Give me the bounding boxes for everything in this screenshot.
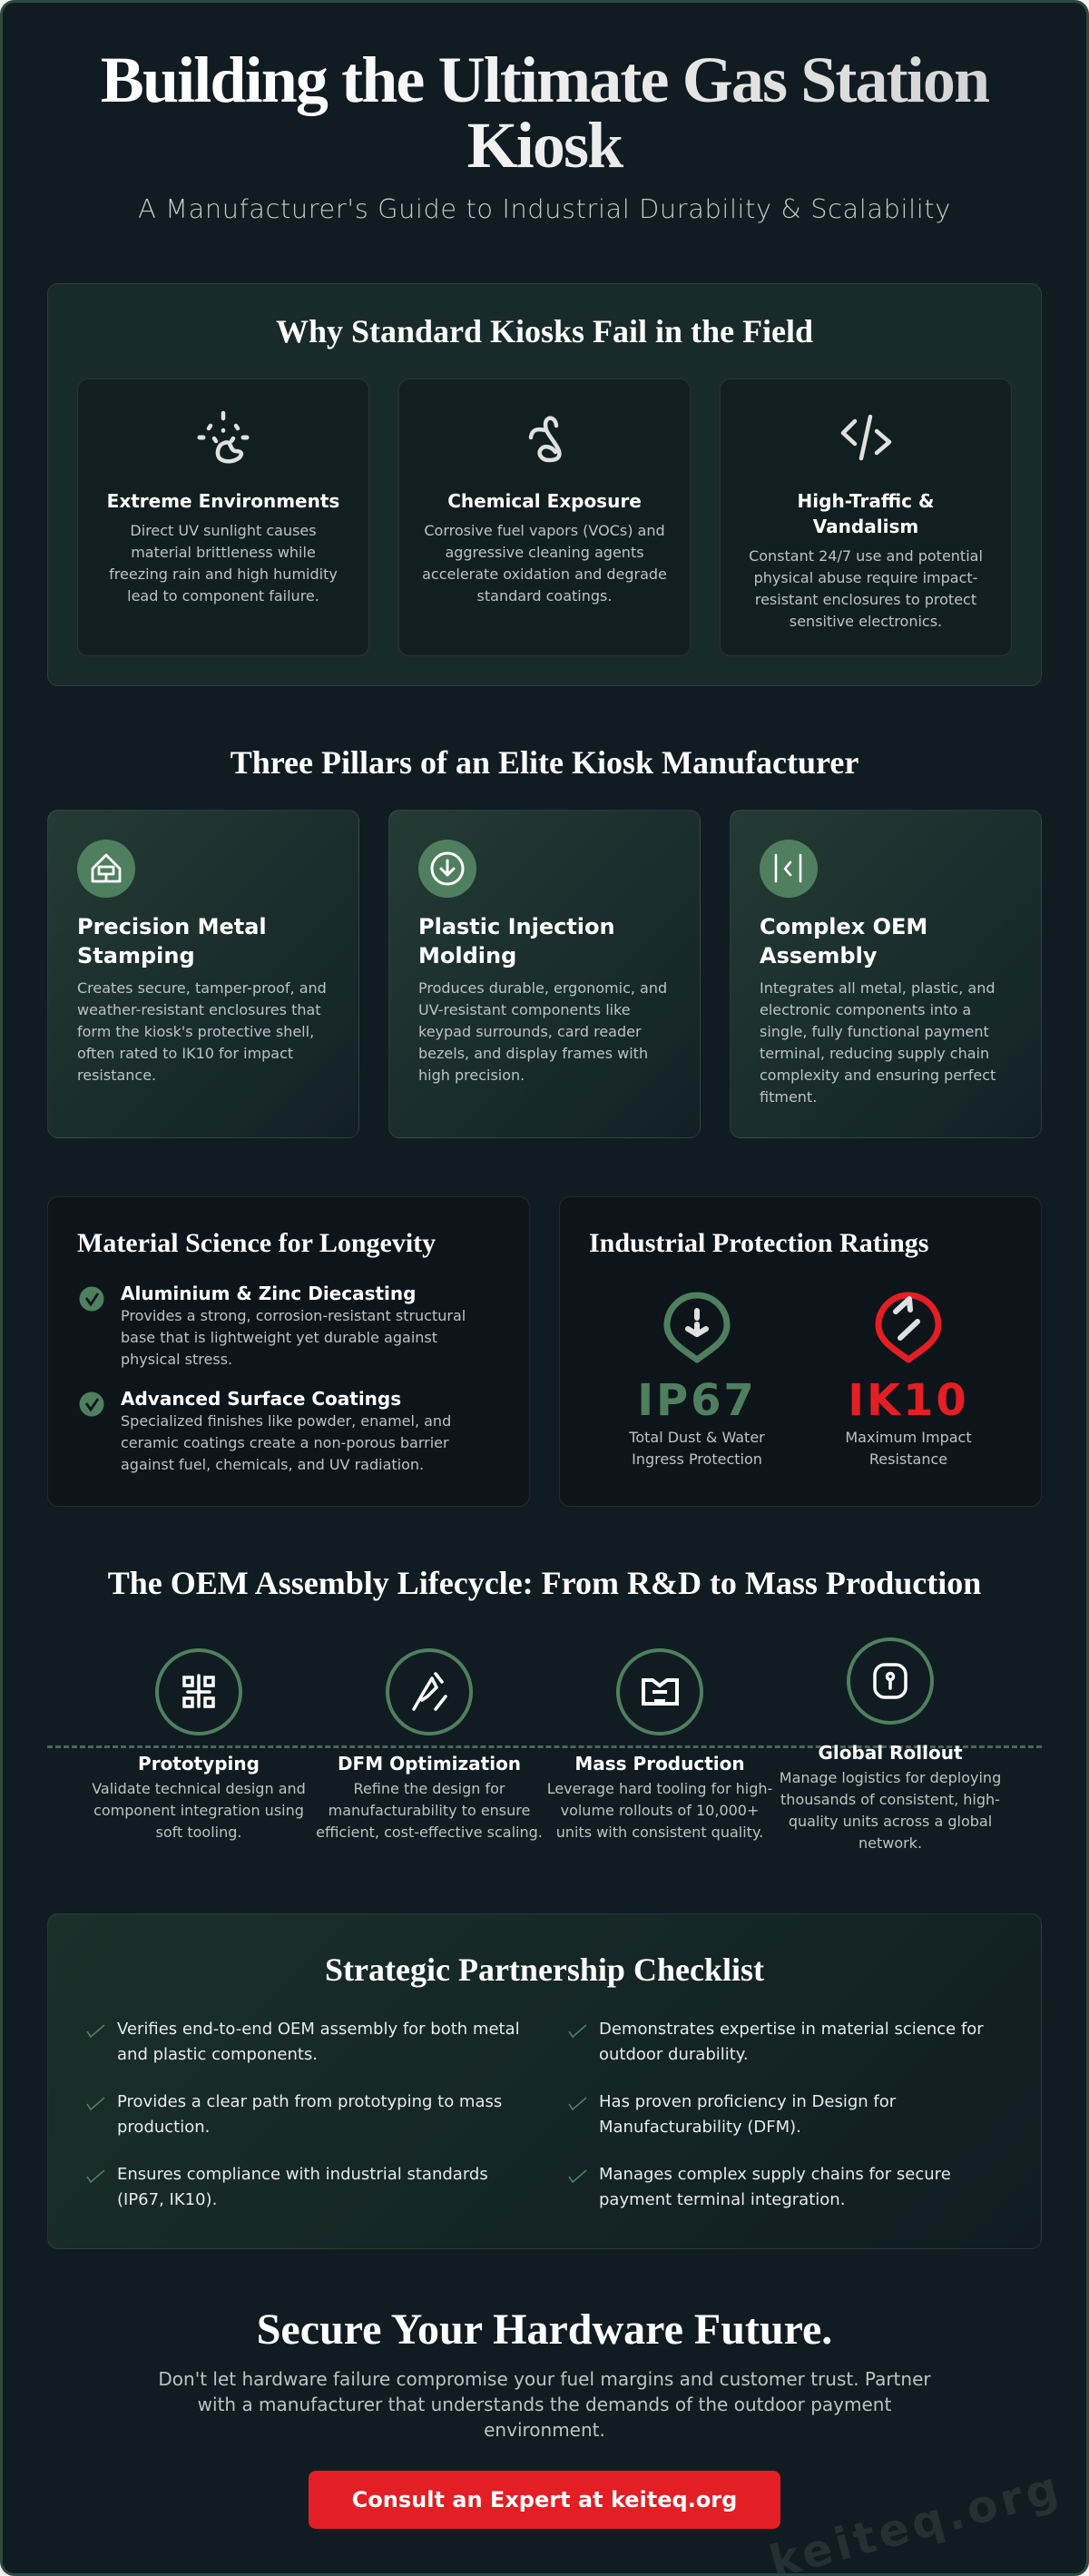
pillar text: resistance.: [77, 1067, 156, 1084]
pillar text: fitment.: [760, 1088, 817, 1106]
rating label: [845, 1429, 972, 1468]
rating label: Total Dust & Water: [629, 1429, 765, 1446]
pillar text: form the kiosk's protective shell,: [77, 1023, 314, 1040]
checklist item 5: [84, 2161, 538, 2212]
item text: [599, 2089, 896, 2140]
cta text: Don't let hardware failure compromise your fuel margins and customer trust. Partner: [158, 2368, 931, 2390]
item heading: Advanced Surface Coatings: [121, 1388, 401, 1410]
item text: Demonstrates expertise in material science for: [599, 2020, 984, 2039]
rating: ip67: [629, 1293, 765, 1468]
pillar heading: Complex OEM: [760, 914, 927, 939]
pillar text: keypad surrounds, card reader: [418, 1023, 642, 1040]
cta heading: Secure Your Hardware Future.: [257, 2306, 832, 2354]
step text: manufacturability to ensure: [329, 1802, 530, 1819]
check mark: [84, 2016, 112, 2043]
pillar text: high precision.: [418, 1067, 525, 1084]
rating: ik10: [845, 1293, 972, 1468]
icon: check badge: [80, 1287, 103, 1311]
icon: chemical droplet: [528, 416, 562, 463]
item heading: Aluminium & Zinc Diecasting: [121, 1283, 416, 1304]
icon: code brackets: [840, 414, 891, 461]
check mark: [566, 2016, 594, 2043]
step text: soft tooling.: [156, 1824, 241, 1841]
icon: check badge: [80, 1392, 103, 1416]
card text: Constant 24/7 use and potential: [749, 547, 983, 565]
step: mass production: [547, 1648, 772, 1841]
card text: [109, 522, 338, 605]
item text: [117, 2089, 502, 2140]
cta button: [309, 2471, 780, 2529]
card text: [422, 522, 667, 605]
pillar text: [418, 979, 667, 1084]
card heading: High-Traffic &: [798, 490, 934, 512]
card heading: Chemical Exposure: [447, 490, 642, 512]
pillar heading: [77, 914, 267, 968]
step text: Manage logistics for deploying: [780, 1769, 1001, 1786]
item text: [121, 1412, 451, 1473]
step text: [775, 1767, 1006, 1854]
rating label: [629, 1429, 765, 1468]
pillar heading: Assembly: [760, 943, 877, 968]
item text: [599, 2017, 984, 2068]
title: Kiosk: [467, 109, 622, 182]
section heading: three pillars: Three Pillars of an Elite Kiosk Manufacturer: [231, 744, 858, 781]
panel heading: Strategic Partnership Checklist: [325, 1952, 764, 1988]
title: Building the Ultimate Gas Station: [101, 44, 988, 116]
pillar text: complexity and ensuring perfect: [760, 1067, 996, 1084]
card text: [749, 547, 983, 630]
item text: Specialized finishes like powder, enamel, and: [121, 1412, 451, 1430]
rating label: Resistance: [869, 1450, 947, 1468]
check mark: [566, 2089, 594, 2116]
item text: [599, 2162, 951, 2213]
cta text: [91, 2366, 998, 2443]
panel: strategic partnership checklist: [47, 1913, 1042, 2249]
item text: [117, 2017, 520, 2068]
step title: DFM Optimization: [338, 1753, 521, 1775]
item text: physical stress.: [121, 1351, 232, 1368]
pillar: precision metal stamping: [47, 810, 359, 1138]
rating value: IK10: [848, 1375, 969, 1426]
item text: outdoor durability.: [599, 2045, 749, 2064]
pillar text: Creates secure, tamper-proof, and: [77, 979, 327, 997]
item text: Has proven proficiency in Design for: [599, 2092, 896, 2111]
card text: aggressive cleaning agents: [445, 544, 644, 561]
icon: impact shield: [875, 1293, 942, 1363]
item text: Ensures compliance with industrial standards: [117, 2165, 488, 2184]
pillar text: UV-resistant components like: [418, 1001, 631, 1018]
section heading: lifecycle: The OEM Assembly Lifecycle: From R&D to Mass Production: [108, 1565, 981, 1601]
step title: Global Rollout: [818, 1742, 963, 1764]
panel: why standard kiosks fail: [47, 283, 1042, 686]
card text: physical abuse require impact-: [754, 569, 977, 586]
step title: Mass Production: [574, 1753, 745, 1775]
icon: sun and droplet: [198, 410, 249, 463]
item text: ceramic coatings create a non-porous barrier: [121, 1434, 449, 1451]
card text: accelerate oxidation and degrade: [422, 565, 667, 583]
material item: diecasting: [80, 1283, 466, 1368]
step text: Leverage hard tooling for high-: [547, 1780, 772, 1797]
title: [0, 47, 1089, 178]
cta button: Consult an Expert at keiteq.org: [352, 2487, 737, 2512]
card: chemical exposure: [398, 379, 691, 656]
checklist item 6: [566, 2161, 1020, 2212]
pillar text: terminal, reducing supply chain: [760, 1045, 989, 1062]
pillar text: Produces durable, ergonomic, and: [418, 979, 667, 997]
step text: units with consistent quality.: [556, 1824, 763, 1841]
icon: house glyph: [91, 853, 122, 882]
pillar text: weather-resistant enclosures that: [77, 1001, 321, 1018]
pillar text: [77, 979, 327, 1084]
pillar text: Integrates all metal, plastic, and: [760, 979, 995, 997]
card text: Direct UV sunlight causes: [130, 522, 317, 539]
item text: and plastic components.: [117, 2045, 318, 2064]
pillar text: bezels, and display frames with: [418, 1045, 648, 1062]
item text: against fuel, chemicals, and UV radiation.: [121, 1456, 424, 1473]
card text: lead to component failure.: [127, 587, 319, 605]
step text: [92, 1780, 306, 1841]
check mark: [566, 2161, 594, 2188]
subtitle: A Manufacturer's Guide to Industrial Durability & Scalability: [138, 193, 951, 224]
step text: [547, 1780, 772, 1841]
panel heading: Why Standard Kiosks Fail in the Field: [276, 313, 813, 349]
pillar text: often rated to IK10 for impact: [77, 1045, 293, 1062]
panel: protection ratings: [559, 1196, 1042, 1507]
pillar text: [760, 979, 996, 1106]
card: extreme environments: [77, 379, 369, 656]
card text: freezing rain and high humidity: [109, 565, 338, 583]
item text: [121, 1307, 466, 1368]
pillar: complex oem assembly: [730, 810, 1042, 1138]
step text: component integration using: [93, 1802, 304, 1819]
cta text: with a manufacturer that understands the demands of the outdoor payment: [198, 2394, 891, 2415]
item text: base that is lightweight yet durable against: [121, 1329, 437, 1346]
check mark: [84, 2089, 112, 2116]
pillar heading: Molding: [418, 943, 516, 968]
icon: download badge: [418, 840, 476, 898]
cta text: environment.: [484, 2419, 605, 2441]
step text: efficient, cost-effective scaling.: [316, 1824, 543, 1841]
step text: [316, 1780, 543, 1841]
card text: resistant enclosures to protect: [755, 591, 976, 608]
pillar heading: [418, 914, 615, 968]
step: prototyping: [92, 1648, 306, 1841]
panel heading: Material Science for Longevity: [77, 1228, 436, 1258]
card heading: Extreme Environments: [107, 490, 339, 512]
step: dfm optimization: [316, 1648, 543, 1841]
pillar heading: [760, 914, 927, 968]
item text: Verifies end-to-end OEM assembly for both metal: [117, 2020, 520, 2039]
checklist item 2: [566, 2016, 1020, 2067]
step text: Refine the design for: [354, 1780, 505, 1797]
card text: Corrosive fuel vapors (VOCs) and: [424, 522, 665, 539]
pillar text: electronic components into a: [760, 1001, 971, 1018]
item text: Manufacturability (DFM).: [599, 2118, 801, 2137]
step text: thousands of consistent, high-: [780, 1791, 1000, 1808]
card text: sensitive electronics.: [790, 613, 942, 630]
card heading: Vandalism: [813, 516, 918, 537]
pillar: plastic injection molding: [388, 810, 701, 1138]
icon: house badge: [77, 840, 135, 898]
card heading: [798, 490, 934, 537]
step text: network.: [858, 1834, 922, 1852]
panel: material science: [47, 1196, 530, 1507]
checklist item 3: [84, 2089, 538, 2139]
rating value: IP67: [637, 1375, 757, 1426]
icon: design pen: [386, 1648, 473, 1735]
pillar heading: Plastic Injection: [418, 914, 615, 939]
pillar heading: Stamping: [77, 943, 195, 968]
icon: water shield: [664, 1293, 730, 1363]
rating label: Ingress Protection: [632, 1450, 762, 1468]
material item: coatings: [80, 1388, 451, 1473]
checklist item 4: [566, 2089, 1020, 2139]
item text: payment terminal integration.: [599, 2190, 845, 2209]
check mark: [84, 2161, 112, 2188]
item text: (IP67, IK10).: [117, 2190, 217, 2209]
checklist item 1: [84, 2016, 538, 2067]
item text: Provides a clear path from prototyping to mass: [117, 2092, 502, 2111]
call to action: [91, 2296, 998, 2532]
header: [101, 44, 989, 224]
step: global rollout: [780, 1637, 1001, 1852]
item text: Provides a strong, corrosion-resistant structural: [121, 1307, 466, 1324]
icon: production box: [616, 1648, 703, 1735]
card text: material brittleness while: [131, 544, 316, 561]
timeline dashed line: [47, 1745, 1042, 1748]
rating label: Maximum Impact: [845, 1429, 972, 1446]
card: high-traffic and vandalism: [720, 379, 1012, 656]
icon: assembly badge: [760, 840, 818, 898]
pillar heading: Precision Metal: [77, 914, 267, 939]
step text: volume rollouts of 10,000+: [561, 1802, 759, 1819]
icon: bars glyph: [775, 853, 802, 882]
icon: prototyping: [155, 1648, 242, 1735]
pillar text: single, fully functional payment: [760, 1023, 989, 1040]
icon: arrow in circle glyph: [430, 851, 465, 886]
item text: Manages complex supply chains for secure: [599, 2165, 951, 2184]
card text: standard coatings.: [477, 587, 612, 605]
icon: location pin: [847, 1637, 934, 1725]
step text: quality units across a global: [789, 1813, 992, 1830]
item text: [117, 2162, 488, 2213]
item text: production.: [117, 2118, 210, 2137]
panel heading: Industrial Protection Ratings: [589, 1228, 928, 1258]
step text: Validate technical design and: [92, 1780, 306, 1797]
step title: Prototyping: [138, 1753, 260, 1775]
